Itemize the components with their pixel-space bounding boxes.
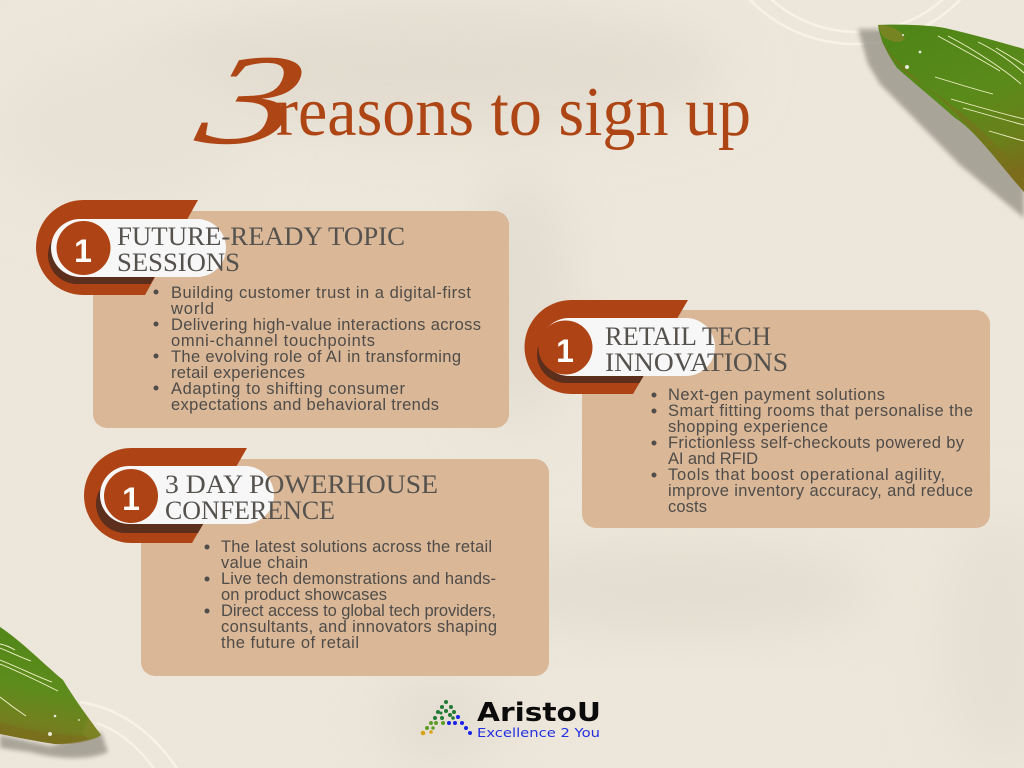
card background <box>582 310 990 528</box>
bullet list: costs <box>668 498 707 516</box>
heading <box>165 469 438 525</box>
bullet list: omni-channel touchpoints <box>171 332 375 350</box>
bullet list: The latest solutions across the retail <box>221 538 492 556</box>
bullet list: shopping experience <box>668 418 828 436</box>
badge <box>36 200 226 295</box>
heading <box>605 321 788 377</box>
bullet list: value chain <box>221 554 308 572</box>
decorative arcs: bottom left <box>80 702 178 768</box>
badge <box>524 300 715 394</box>
bullet list <box>154 284 481 414</box>
badge <box>84 448 274 543</box>
bullet list <box>204 538 497 652</box>
bullet list: Delivering high-value interactions across <box>171 316 481 334</box>
title: 3 <box>184 28 321 171</box>
panel: retail tech innovations <box>524 300 990 528</box>
leaf: top right <box>858 25 1024 218</box>
bullet list: Next-gen payment solutions <box>668 386 885 404</box>
heading <box>117 221 405 277</box>
decorative arcs: top right <box>708 0 1002 44</box>
bullet list: expectations and behavioral trends <box>171 396 439 414</box>
card background <box>141 459 549 676</box>
title <box>184 28 751 171</box>
bullet list: Direct access to global tech providers, <box>221 602 496 620</box>
heading: SESSIONS <box>117 247 240 277</box>
tagline: Excellence 2 You <box>477 726 600 740</box>
bullet list: improve inventory accuracy, and reduce <box>668 482 973 500</box>
panel: 3 day powerhouse conference <box>84 448 549 676</box>
bullet list: The evolving role of AI in transforming <box>171 348 461 366</box>
bullet list: Adapting to shifting consumer <box>171 380 406 398</box>
icon: dot triangle <box>421 700 472 735</box>
bullet list: Tools that boost operational agility, <box>668 466 945 484</box>
badge: 1 <box>74 233 92 269</box>
bullet list: consultants, and innovators shaping <box>221 618 497 636</box>
heading: 3 DAY POWERHOUSE <box>165 469 438 499</box>
heading: CONFERENCE <box>165 495 335 525</box>
bullet list: AI and RFID <box>668 450 758 468</box>
bullet list: Live tech demonstrations and hands- <box>221 570 496 588</box>
wordmark: AristoU <box>477 698 601 728</box>
bullet list: Building customer trust in a digital-first <box>171 284 471 302</box>
heading: RETAIL TECH <box>605 321 771 351</box>
panel: future-ready topic sessions <box>36 200 509 428</box>
badge: 1 <box>122 481 140 517</box>
badge: 1 <box>556 333 574 369</box>
bullet list: world <box>170 300 214 318</box>
logo: AristoU <box>421 698 601 740</box>
title: reasons to sign up <box>276 74 751 151</box>
bullet list: on product showcases <box>221 586 387 604</box>
bullet list: the future of retail <box>221 634 359 652</box>
leaf: bottom left <box>0 627 108 758</box>
heading: FUTURE-READY TOPIC <box>117 221 405 251</box>
card background <box>93 211 509 428</box>
bullet list: Smart fitting rooms that personalise the <box>668 402 973 420</box>
bullet list: Frictionless self-checkouts powered by <box>668 434 965 452</box>
bullet list <box>652 386 973 516</box>
bullet list: retail experiences <box>171 364 305 382</box>
heading: INNOVATIONS <box>605 347 788 377</box>
